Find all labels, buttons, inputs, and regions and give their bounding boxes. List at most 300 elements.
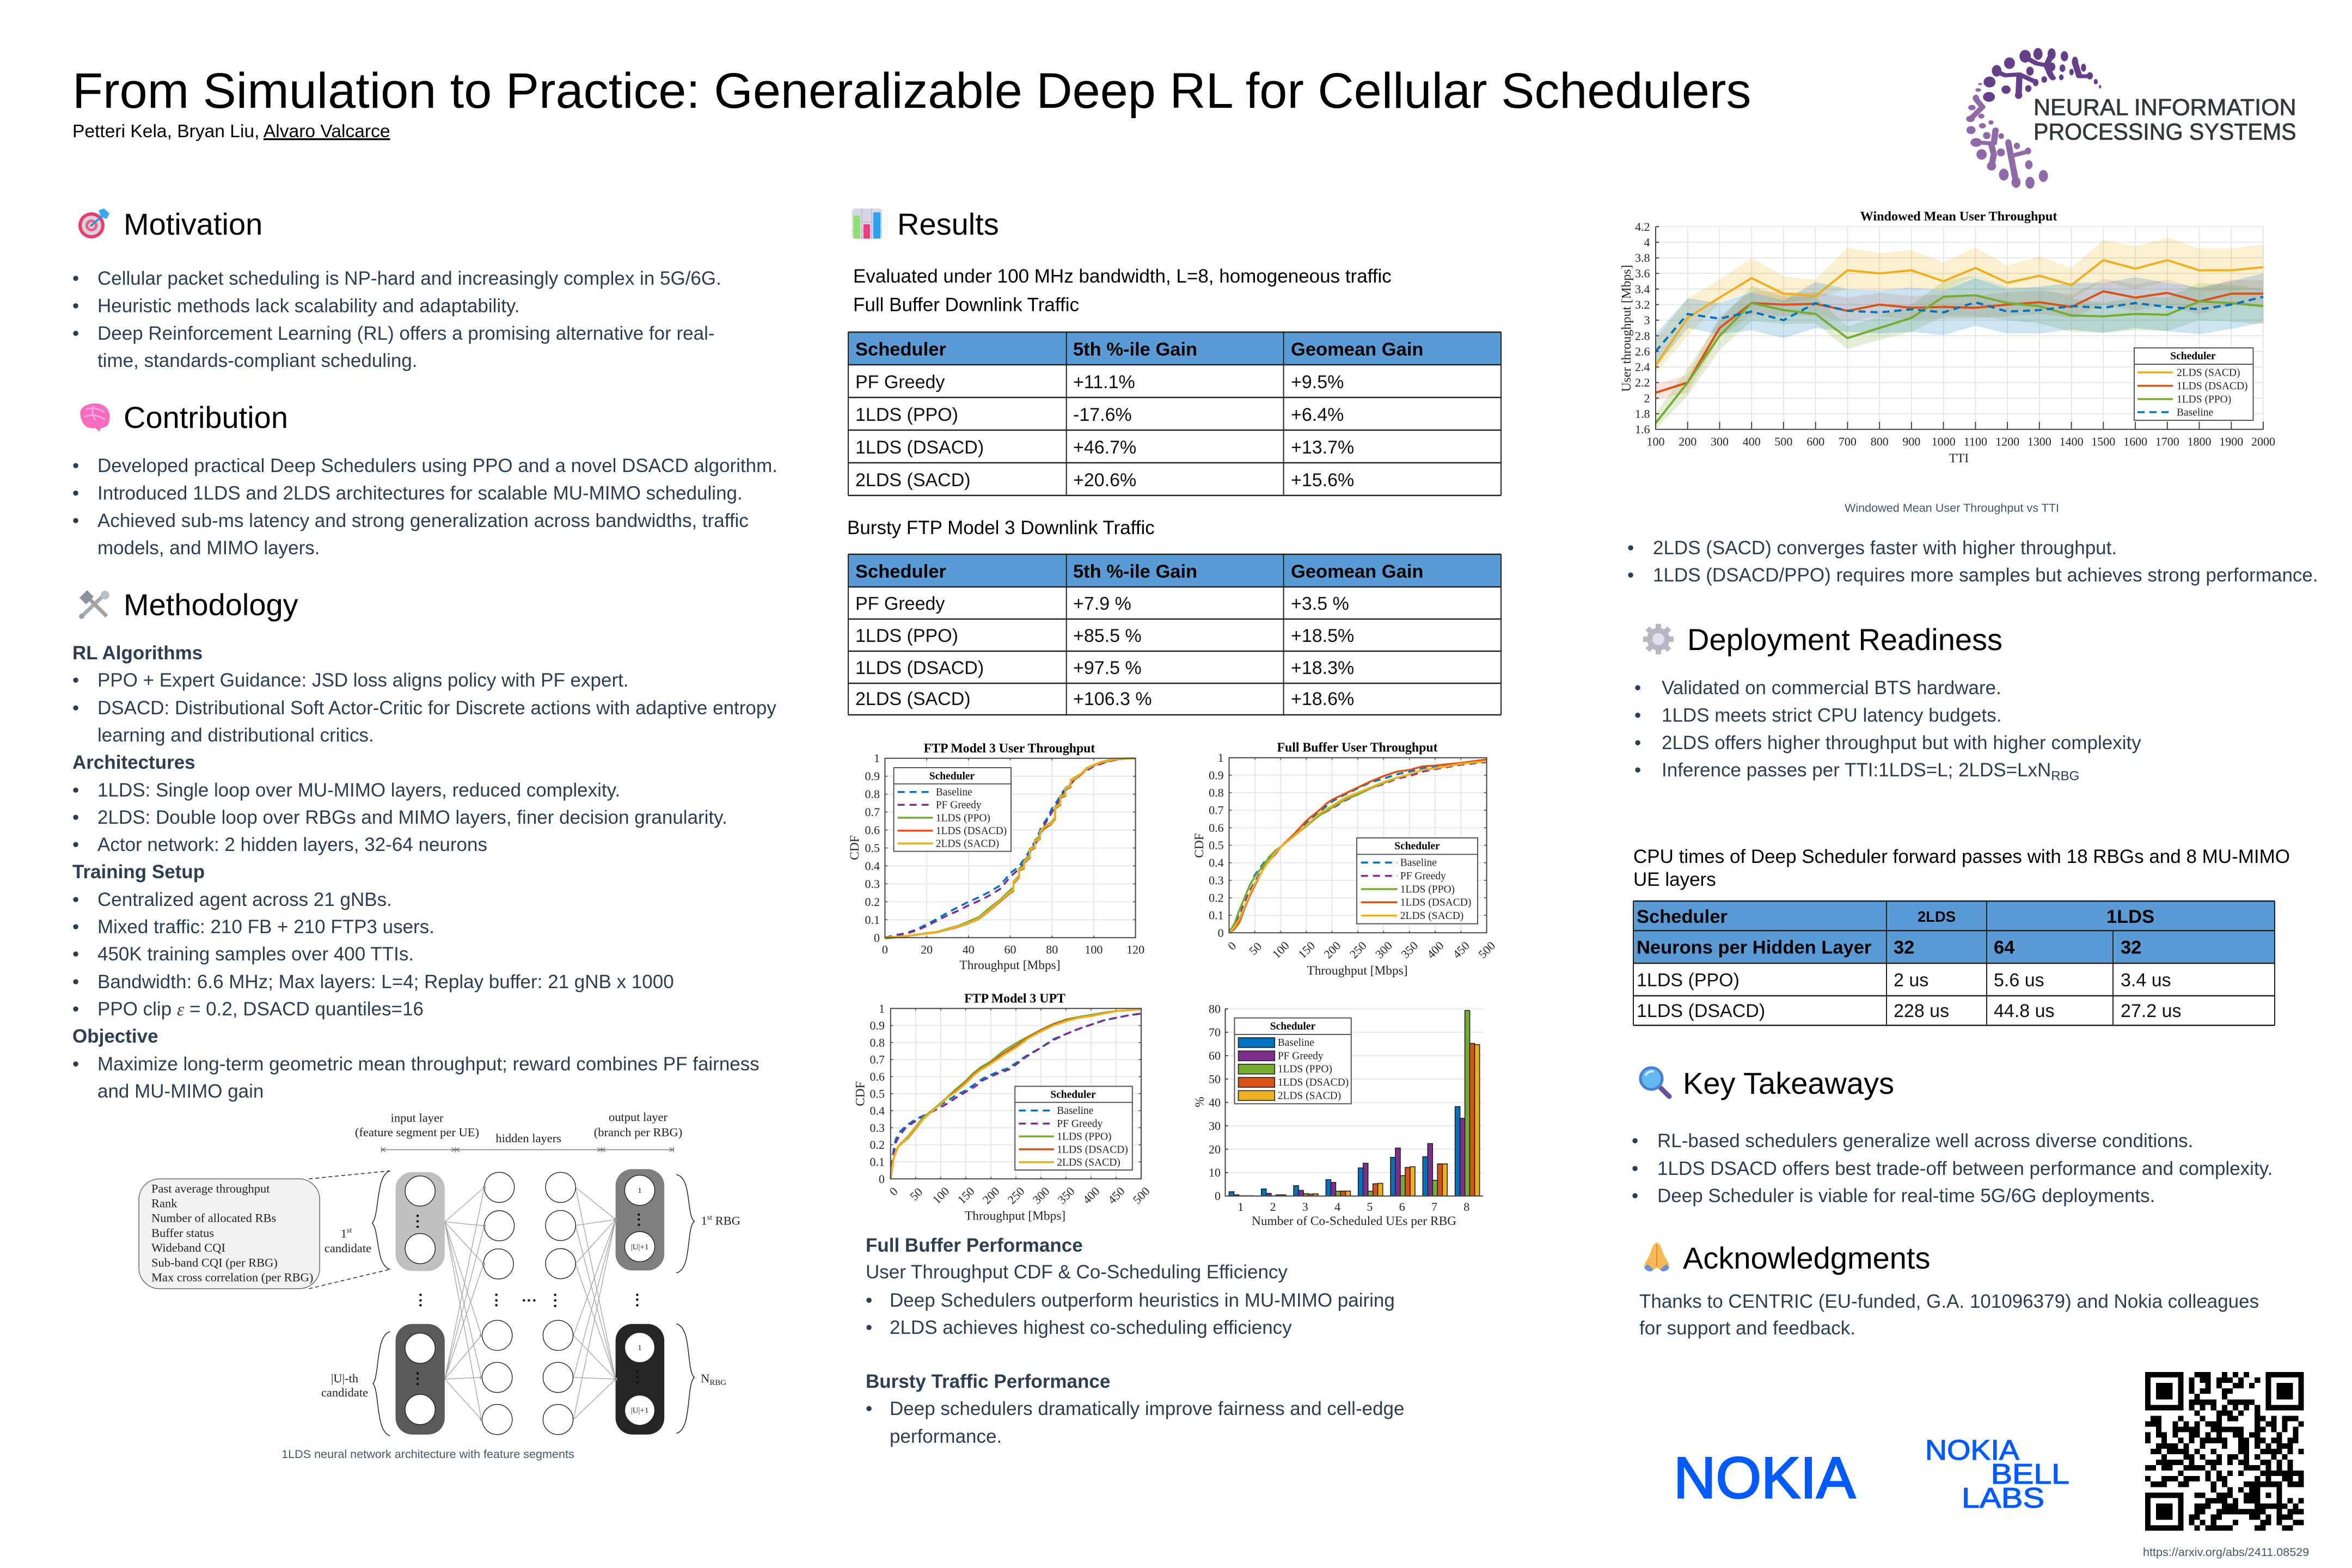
chart: Windowed Mean User Throughput: 900 [1902, 434, 1920, 449]
table: CPU times: 3.4 us [2121, 970, 2171, 991]
text: convergence bullets: • [1627, 565, 1634, 586]
QR code [2145, 1372, 2304, 1531]
chart: Windowed Mean User Throughput: 4 [1644, 235, 1650, 249]
diagram: 1LDS neural network architecture: candidate [324, 1241, 371, 1255]
chart: FTP Model 3 UPT: 200 [980, 1184, 1002, 1206]
chart: Windowed Mean User Throughput: 3.8 [1635, 251, 1650, 265]
chart: FTP Model 3 UPT: 1LDS (DSACD) [1057, 1144, 1128, 1155]
table: bursty traffic gains [848, 554, 1501, 715]
diagram: 1LDS neural network architecture: N [701, 1371, 709, 1385]
caption: windowed throughput: Windowed Mean User Throughput vs TTI [1845, 501, 2059, 514]
table: full buffer gains: 1LDS (DSACD) [855, 437, 984, 458]
chart: Windowed Mean User Throughput: 4.2 [1635, 220, 1650, 234]
chart: FTP Model 3 User Throughput: 0 [874, 931, 880, 945]
chart: Windowed Mean User Throughput: 2000 [2251, 434, 2275, 449]
chart: FTP Model 3 User Throughput: 0.7 [865, 805, 880, 819]
chart: co-scheduled UEs per RBG bars: 5 [1367, 1200, 1373, 1214]
chart: co-scheduled UEs per RBG bars: 70 [1209, 1026, 1221, 1039]
text: methodology lists: • [72, 670, 79, 691]
chart: Full Buffer User Throughput: Scheduler [1394, 841, 1440, 852]
text: convergence bullets [1627, 537, 2318, 586]
chart: Full Buffer User Throughput: 500 [1475, 939, 1498, 961]
chart: Windowed Mean User Throughput: 3.4 [1635, 282, 1650, 296]
chart: Windowed Mean User Throughput: 400 [1743, 434, 1761, 449]
icon: target [78, 209, 109, 238]
caption: neural network: 1LDS neural network architecture with feature segments [281, 1447, 574, 1461]
text: contribution bullets: Achieved sub-ms latency and strong generalization across bandwidths, traffic [97, 510, 749, 531]
chart: Full Buffer User Throughput: PF Greedy [1400, 871, 1446, 882]
text: motivation bullets: • [72, 295, 79, 317]
chart: Full Buffer User Throughput: 0.9 [1209, 768, 1224, 782]
chart: co-scheduled UEs per RBG bars: Baseline [1278, 1037, 1314, 1049]
table: bursty traffic gains: +18.6% [1291, 689, 1354, 709]
chart: FTP Model 3 UPT: 100 [929, 1184, 952, 1206]
text: performance findings: User Throughput CDF & Co-Scheduling Efficiency [866, 1261, 1288, 1283]
diagram: 1LDS neural network architecture: candidate [321, 1386, 368, 1399]
chart: co-scheduled UEs per RBG bars: 4 [1334, 1200, 1340, 1214]
chart: Full Buffer User Throughput: 0.1 [1209, 909, 1224, 922]
chart: Windowed Mean User Throughput: 2.8 [1635, 329, 1650, 342]
diagram: 1LDS neural network architecture: RBG [712, 1214, 740, 1228]
text: deployment bullets: RBG [2051, 769, 2079, 783]
table: bursty traffic gains: +85.5 % [1073, 626, 1142, 646]
chart: Full Buffer User Throughput: 400 [1424, 939, 1447, 961]
chart: Full Buffer User Throughput: 1LDS (PPO) [1400, 884, 1455, 895]
table: CPU times: 32 [1894, 938, 1914, 958]
table: full buffer gains: Scheduler [855, 339, 946, 360]
chart: FTP Model 3 User Throughput: 80 [1046, 943, 1058, 957]
table: bursty traffic gains: 1LDS (DSACD) [855, 658, 984, 678]
text: deployment bullets: • [1634, 759, 1641, 781]
chart: FTP Model 3 User Throughput: 1LDS (DSACD) [936, 825, 1007, 837]
chart: Full Buffer User Throughput: 2LDS (SACD) [1400, 910, 1463, 922]
text: acknowledgments body [1639, 1291, 2259, 1339]
chart: Full Buffer User Throughput: 1 [1218, 751, 1224, 764]
chart: Windowed Mean User Throughput: 2.6 [1635, 345, 1650, 358]
text: deployment bullets: 2LDS offers higher throughput but with higher complexity [1662, 732, 2141, 754]
chart: Windowed Mean User Throughput: 300 [1711, 434, 1729, 449]
table: bursty traffic gains: +18.3% [1291, 658, 1354, 678]
table: full buffer gains: +13.7% [1291, 437, 1354, 458]
icon: tools [79, 590, 109, 619]
chart: Windowed Mean User Throughput: 1900 [2219, 434, 2243, 449]
chart: FTP Model 3 UPT: 0.8 [870, 1036, 885, 1049]
chart: co-scheduled UEs per RBG bars: 1 [1238, 1200, 1244, 1214]
table: bursty traffic gains: 2LDS (SACD) [855, 689, 971, 709]
table: full buffer gains: 2LDS (SACD) [855, 470, 971, 491]
chart: Windowed Mean User Throughput: 1100 [1964, 434, 1987, 449]
chart: Full Buffer User Throughput: 0.8 [1209, 786, 1224, 799]
text: methodology lists: Architectures [72, 752, 195, 773]
chart: Windowed Mean User Throughput: 1LDS (PPO) [2177, 394, 2231, 405]
text: methodology lists: • [72, 780, 79, 801]
text: methodology lists: Training Setup [72, 861, 205, 883]
logo: NeurIPS [1966, 48, 2296, 189]
diagram: 1LDS neural network architecture: Wideband CQI [151, 1241, 225, 1254]
text: performance findings: Bursty Traffic Performance [866, 1371, 1110, 1392]
table: CPU times: 1LDS [2106, 906, 2154, 927]
text: methodology lists: Actor network: 2 hidden layers, 32-64 neurons [97, 834, 487, 855]
text: contribution bullets: • [72, 482, 79, 504]
chart: FTP Model 3 UPT: 1LDS (PPO) [1057, 1131, 1112, 1143]
table: bursty traffic gains: +7.9 % [1073, 593, 1131, 614]
chart: Windowed Mean User Throughput: 600 [1806, 434, 1824, 449]
table: CPU times: 5.6 us [1994, 970, 2044, 991]
text: deployment bullets: 1LDS meets strict CPU latency budgets. [1662, 705, 2001, 726]
text: methodology lists: PPO + Expert Guidance: JSD loss aligns policy with PF expert. [97, 670, 629, 691]
text: motivation bullets [72, 268, 721, 371]
chart: Windowed Mean User Throughput: 1300 [2028, 434, 2051, 449]
chart: Full Buffer User Throughput: 0 [1225, 939, 1239, 953]
text: performance findings: • [866, 1317, 872, 1338]
diagram: 1LDS neural network architecture: Sub-band CQI (per RBG) [151, 1255, 278, 1269]
chart: Windowed Mean User Throughput: 1LDS (DSACD) [2177, 381, 2248, 392]
chart: Full Buffer User Throughput: 0.5 [1209, 838, 1224, 852]
table: full buffer gains: +11.1% [1073, 372, 1135, 393]
text: performance findings: performance. [890, 1426, 1002, 1447]
text: CPU times description: UE layers [1633, 869, 1716, 890]
text: motivation bullets: Deep Reinforcement Learning (RL) offers a promising alternative for real- [97, 323, 715, 344]
chart: co-scheduled UEs per RBG bars: 80 [1209, 1002, 1221, 1016]
chart: Full Buffer User Throughput: 0.4 [1209, 856, 1224, 869]
table: CPU times: Scheduler [1637, 906, 1728, 927]
text: methodology lists: Mixed traffic: 210 FB + 210 FTP3 users. [97, 916, 434, 938]
text: methodology lists: learning and distributional critics. [97, 725, 374, 746]
text: deployment bullets: • [1634, 677, 1641, 699]
chart: FTP Model 3 UPT: 150 [955, 1184, 977, 1206]
chart: Full Buffer User Throughput: 250 [1347, 939, 1369, 961]
diagram: 1LDS neural network architecture: Number of allocated RBs [151, 1211, 276, 1225]
chart: FTP Model 3 User Throughput: 0 [882, 943, 888, 957]
chart: FTP Model 3 UPT: 50 [907, 1185, 925, 1203]
logo: NeurIPS: PROCESSING SYSTEMS [2033, 119, 2296, 145]
table: bursty traffic gains: 1LDS (PPO) [855, 626, 958, 646]
heading: contribution: Contribution [124, 400, 288, 434]
chart: FTP Model 3 User Throughput: 0.8 [865, 787, 880, 801]
diagram: 1LDS neural network architecture: |U|-th [331, 1371, 358, 1385]
heading: results: Results [897, 207, 999, 241]
text: deployment bullets: • [1634, 705, 1641, 726]
text: CPU times description: CPU times of Deep Scheduler forward passes with 18 RBGs and 8 MU-MIMO [1633, 846, 2290, 867]
chart: Windowed Mean User Throughput: 2.2 [1635, 376, 1650, 389]
chart: FTP Model 3 UPT: Scheduler [1050, 1089, 1096, 1101]
chart: Full Buffer User Throughput: 0.2 [1209, 891, 1224, 905]
text: methodology lists: • [72, 999, 79, 1020]
text: acknowledgments body: for support and feedback. [1639, 1318, 1855, 1339]
chart: FTP Model 3 UPT: 0.3 [870, 1121, 885, 1135]
text: methodology lists: Bandwidth: 6.6 MHz; Max layers: L=4; Replay buffer: 21 gNB x 1000 [97, 971, 674, 993]
diagram: 1LDS neural network architecture: (branch per RBG) [594, 1125, 682, 1139]
chart: FTP Model 3 User Throughput: Scheduler [929, 771, 975, 782]
logo: Nokia Bell Labs: NOKIA [1925, 1435, 2019, 1466]
text: takeaways bullets: RL-based schedulers generalize well across diverse conditions. [1657, 1130, 2193, 1152]
text: methodology lists: • [72, 697, 79, 719]
chart: co-scheduled UEs per RBG bars: PF Greedy [1278, 1050, 1324, 1062]
chart: co-scheduled UEs per RBG bars: 0 [1215, 1189, 1221, 1203]
text: methodology lists: • [72, 834, 79, 855]
chart: Windowed Mean User Throughput: 2LDS (SACD) [2177, 367, 2240, 378]
chart: co-scheduled UEs per RBG bars: 2LDS (SACD) [1278, 1090, 1341, 1101]
text: motivation bullets: • [72, 268, 79, 289]
chart: FTP Model 3 UPT: 0.1 [870, 1155, 885, 1168]
chart: co-scheduled UEs per RBG bars: 6 [1399, 1200, 1405, 1214]
text: takeaways bullets: • [1632, 1158, 1638, 1179]
chart: Windowed Mean User Throughput: 200 [1679, 434, 1696, 449]
text: contribution bullets: models, and MIMO layers. [97, 537, 320, 559]
chart: FTP Model 3 User Throughput: 0.9 [865, 769, 880, 783]
panel: acknowledgments [1639, 1241, 2259, 1339]
chart: Windowed Mean User Throughput: 3.2 [1635, 298, 1650, 311]
chart: FTP Model 3 User Throughput: 60 [1004, 943, 1016, 957]
panel: motivation [72, 207, 721, 371]
text: performance findings: • [866, 1290, 872, 1311]
table: full buffer gains: +15.6% [1291, 470, 1354, 491]
chart: Full Buffer User Throughput: 1LDS (DSACD) [1400, 897, 1471, 909]
diagram: 1LDS neural network architecture: |U|+1 [631, 1406, 648, 1415]
chart: FTP Model 3 UPT: 300 [1030, 1184, 1052, 1206]
chart: Windowed Mean User Throughput: 3 [1644, 314, 1650, 327]
chart: Full Buffer User Throughput: Throughput [Mbps] [1307, 964, 1408, 978]
heading: methodology: Methodology [124, 587, 298, 622]
chart: co-scheduled UEs per RBG bars: 10 [1209, 1166, 1221, 1179]
text: takeaways bullets: • [1632, 1130, 1638, 1152]
chart: FTP Model 3 User Throughput: 0.5 [865, 841, 880, 855]
text: evaluation conditions: Evaluated under 100 MHz bandwidth, L=8, homogeneous traffic [853, 266, 1392, 287]
heading: deployment readiness: Deployment Readiness [1687, 622, 2002, 657]
icon: magnifier [1640, 1068, 1669, 1097]
table: CPU times: 2 us [1894, 970, 1928, 991]
chart: Windowed Mean User Throughput: 100 [1646, 434, 1665, 449]
chart: FTP Model 3 User Throughput: 0.3 [865, 877, 880, 891]
table: full buffer gains: +6.4% [1291, 405, 1344, 425]
table: bursty traffic gains: +97.5 % [1073, 658, 1142, 678]
panel: key takeaways [1632, 1066, 2273, 1206]
table: CPU times: 44.8 us [1994, 1001, 2055, 1021]
chart: FTP Model 3 UPT: FTP Model 3 UPT [964, 992, 1065, 1006]
chart: FTP Model 3 UPT: 0.4 [870, 1104, 885, 1118]
table: bursty traffic gains: Scheduler [855, 561, 946, 582]
text: takeaways bullets: 1LDS DSACD offers best trade-off between performance and complexity. [1657, 1158, 2273, 1179]
text: methodology lists: and MU-MIMO gain [97, 1081, 264, 1102]
text: methodology lists: Objective [72, 1026, 158, 1047]
chart: Full Buffer User Throughput [1192, 741, 1498, 978]
icon: bar chart [852, 209, 882, 239]
chart: FTP Model 3 UPT: PF Greedy [1057, 1118, 1103, 1130]
chart: FTP Model 3 User Throughput: 0.4 [865, 859, 880, 873]
chart: Windowed Mean User Throughput: 1700 [2155, 434, 2179, 449]
chart: FTP Model 3 User Throughput: 100 [1085, 943, 1102, 957]
chart: FTP Model 3 User Throughput: 0.2 [865, 895, 880, 909]
icon: praying hands [1644, 1242, 1669, 1271]
diagram: 1LDS neural network architecture: 1 [341, 1227, 347, 1240]
chart: FTP Model 3 UPT: 0.7 [870, 1053, 885, 1067]
text: takeaways bullets: Deep Scheduler is viable for real-time 5G/6G deployments. [1657, 1185, 2155, 1206]
text: takeaways bullets: • [1632, 1185, 1638, 1206]
chart: co-scheduled UEs per RBG bars: 30 [1209, 1119, 1221, 1132]
chart: Windowed Mean User Throughput: 1000 [1932, 434, 1956, 449]
chart: FTP Model 3 UPT: 450 [1105, 1184, 1128, 1206]
text: motivation bullets: • [72, 323, 79, 344]
chart: FTP Model 3 User Throughput: 40 [963, 943, 975, 957]
heading: motivation: Motivation [124, 207, 262, 241]
chart: Windowed Mean User Throughput: 1600 [2123, 434, 2147, 449]
table: full buffer gains: PF Greedy [855, 372, 945, 393]
icon: brain [80, 403, 109, 432]
logo: Nokia: NOKIA [1674, 1445, 1856, 1510]
diagram: 1LDS neural network architecture: (feature segment per UE) [355, 1125, 479, 1139]
chart: Windowed Mean User Throughput: Scheduler [2170, 351, 2216, 362]
text: methodology lists: • [72, 1054, 79, 1075]
diagram: 1LDS neural network architecture: 1 [638, 1186, 642, 1195]
text: acknowledgments body: Thanks to CENTRIC (EU-funded, G.A. 101096379) and Nokia colleagues [1639, 1291, 2259, 1312]
chart: Full Buffer User Throughput: 0.6 [1209, 821, 1224, 835]
chart: Full Buffer User Throughput: 300 [1373, 939, 1395, 961]
chart: FTP Model 3 UPT [854, 992, 1153, 1223]
text: contribution bullets: • [72, 510, 79, 531]
chart: Windowed Mean User Throughput: TTI [1949, 451, 1969, 465]
chart: Windowed Mean User Throughput: 2.4 [1635, 360, 1650, 374]
chart: co-scheduled UEs per RBG bars: Number of Co-Scheduled UEs per RBG [1252, 1214, 1456, 1228]
chart: co-scheduled UEs per RBG bars: % [1193, 1097, 1207, 1107]
chart: co-scheduled UEs per RBG bars: 7 [1431, 1200, 1437, 1214]
chart: FTP Model 3 UPT: 250 [1005, 1184, 1027, 1206]
chart: FTP Model 3 UPT: 0 [879, 1172, 885, 1186]
diagram: 1LDS neural network architecture: st [707, 1214, 712, 1222]
chart: FTP Model 3 UPT: 500 [1130, 1184, 1153, 1206]
text: motivation bullets: Cellular packet scheduling is NP-hard and increasingly complex in 5G/6G. [97, 268, 721, 289]
chart: Windowed Mean User Throughput: 500 [1774, 434, 1792, 449]
chart: FTP Model 3 User Throughput: 1LDS (PPO) [936, 812, 990, 824]
text: methodology lists: • [72, 807, 79, 828]
diagram: 1LDS neural network architecture: Rank [151, 1197, 177, 1210]
text: performance findings: 2LDS achieves highest co-scheduling efficiency [890, 1317, 1292, 1338]
table: CPU times: 228 us [1894, 1001, 1949, 1021]
chart: co-scheduled UEs per RBG bars: 1LDS (DSACD) [1278, 1077, 1349, 1088]
table: bursty traffic gains: +3.5 % [1291, 593, 1349, 614]
table: bursty traffic gains: PF Greedy [855, 593, 945, 614]
text: methodology lists: 2LDS: Double loop over RBGs and MIMO layers, finer decision granularity. [97, 807, 727, 828]
text: arXiv URL: https://arxiv.org/abs/2411.08529 [2143, 1545, 2309, 1559]
chart: Full Buffer User Throughput: 200 [1321, 939, 1343, 961]
diagram: 1LDS neural network architecture [139, 1110, 740, 1436]
table: CPU times: 1LDS (DSACD) [1637, 1001, 1765, 1021]
chart: FTP Model 3 User Throughput: 2LDS (SACD) [936, 838, 999, 850]
diagram: 1LDS neural network architecture: Buffer status [151, 1226, 214, 1240]
table: CPU times: 32 [2121, 938, 2141, 958]
diagram: 1LDS neural network architecture: RBG [709, 1379, 726, 1387]
table: CPU times [1633, 901, 2275, 1025]
chart: FTP Model 3 UPT: Baseline [1057, 1105, 1093, 1117]
chart: FTP Model 3 UPT: 2LDS (SACD) [1057, 1157, 1120, 1168]
chart: co-scheduled UEs per RBG bars [1193, 1002, 1483, 1228]
icon: gear [1643, 624, 1674, 654]
table: full buffer gains: -17.6% [1073, 405, 1132, 425]
panel: contribution [72, 400, 777, 559]
chart: FTP Model 3 User Throughput: 20 [921, 943, 933, 957]
diagram: 1LDS neural network architecture: 1 [701, 1214, 707, 1228]
text: methodology lists: • [72, 916, 79, 938]
text: methodology lists: • [72, 971, 79, 993]
chart: FTP Model 3 UPT: 0.6 [870, 1070, 885, 1083]
chart: Windowed Mean User Throughput: 800 [1871, 434, 1889, 449]
chart: FTP Model 3 UPT: 350 [1055, 1184, 1077, 1206]
text: contribution bullets: Developed practical Deep Schedulers using PPO and a novel DSACD algorithm. [97, 455, 777, 476]
text: performance findings: Deep schedulers dramatically improve fairness and cell-edge [890, 1398, 1404, 1419]
chart: Windowed Mean User Throughput: 1.8 [1635, 407, 1650, 420]
table: bursty traffic gains: +106.3 % [1073, 689, 1152, 709]
text: deployment bullets: Inference passes per TTI:1LDS=L; 2LDS=LxN [1662, 759, 2051, 781]
panel: methodology [72, 587, 776, 1102]
panel: results [847, 207, 1501, 1447]
diagram: 1LDS neural network architecture: |U|+1 [631, 1243, 648, 1252]
text: motivation bullets: time, standards-compliant scheduling. [97, 350, 418, 371]
chart: Windowed Mean User Throughput: 1200 [1995, 434, 2019, 449]
text: takeaways bullets [1632, 1130, 2273, 1206]
chart: Windowed Mean User Throughput: Windowed Mean User Throughput [1860, 209, 2057, 224]
logo: Nokia Bell Labs: BELL [1991, 1459, 2069, 1490]
text: methodology lists: 1LDS: Single loop over MU-MIMO layers, reduced complexity. [97, 780, 620, 801]
table: bursty traffic gains: 5th %-ile Gain [1073, 561, 1197, 582]
table: full buffer gains: Geomean Gain [1291, 339, 1423, 360]
chart: FTP Model 3 UPT: CDF [854, 1081, 868, 1106]
text: deployment bullets [1634, 677, 2141, 783]
text: performance findings [866, 1235, 1404, 1447]
table: full buffer gains: +46.7% [1073, 437, 1136, 458]
heading: acknowledgments: Acknowledgments [1683, 1241, 1930, 1275]
diagram: 1LDS neural network architecture: 1 [638, 1344, 642, 1352]
table: CPU times: 64 [1994, 938, 2014, 958]
diagram: 1LDS neural network architecture: input layer [391, 1111, 444, 1124]
diagram: 1LDS neural network architecture: Max cross correlation (per RBG) [151, 1271, 313, 1284]
text: convergence bullets: 1LDS (DSACD/PPO) requires more samples but achieves strong performance. [1653, 565, 2318, 586]
diagram: 1LDS neural network architecture: hidden layers [495, 1131, 561, 1145]
chart: co-scheduled UEs per RBG bars: 40 [1209, 1095, 1221, 1109]
panel: deployment readiness [1634, 622, 2141, 783]
table: full buffer gains: 5th %-ile Gain [1073, 339, 1197, 360]
text: methodology lists: Centralized agent across 21 gNBs. [97, 889, 392, 910]
chart: co-scheduled UEs per RBG bars: Scheduler [1270, 1021, 1315, 1032]
chart: Full Buffer User Throughput: CDF [1192, 833, 1206, 858]
chart: Full Buffer User Throughput: 0.3 [1209, 873, 1224, 887]
chart: Windowed Mean User Throughput: 1400 [2060, 434, 2084, 449]
text: methodology lists: 450K training samples over 400 TTIs. [97, 944, 414, 965]
chart: co-scheduled UEs per RBG bars: 3 [1302, 1200, 1308, 1214]
chart: Windowed Mean User Throughput: 1.6 [1635, 422, 1650, 436]
diagram: 1LDS neural network architecture: Past average throughput [151, 1182, 270, 1196]
text: deployment bullets: • [1634, 732, 1641, 754]
logo: Nokia Bell Labs: LABS [1962, 1483, 2044, 1514]
diagram: 1LDS neural network architecture: output layer [609, 1110, 668, 1124]
table: bursty traffic gains: +18.5% [1291, 626, 1354, 646]
chart: FTP Model 3 User Throughput: Throughput [Mbps] [959, 958, 1061, 972]
heading: key takeaways: Key Takeaways [1683, 1066, 1894, 1100]
text: bursty traffic heading: Bursty FTP Model 3 Downlink Traffic [847, 517, 1155, 538]
chart: FTP Model 3 UPT: Throughput [Mbps] [965, 1209, 1065, 1223]
text: performance findings: • [866, 1398, 872, 1419]
chart: Windowed Mean User Throughput: 700 [1839, 434, 1857, 449]
table: bursty traffic gains: Geomean Gain [1291, 561, 1423, 582]
table: full buffer gains: +20.6% [1073, 470, 1136, 491]
chart: Full Buffer User Throughput: 100 [1270, 939, 1292, 961]
text: deployment bullets: Validated on commercial BTS hardware. [1662, 677, 2001, 699]
text: contribution bullets: Introduced 1LDS and 2LDS architectures for scalable MU-MIMO scheduling. [97, 482, 743, 504]
text: convergence bullets: 2LDS (SACD) converges faster with higher throughput. [1653, 537, 2117, 559]
text: methodology lists [72, 642, 776, 1102]
table: CPU times: 27.2 us [2121, 1001, 2182, 1021]
chart: FTP Model 3 UPT: 0.9 [870, 1019, 885, 1032]
text: methodology lists: • [72, 944, 79, 965]
chart: Full Buffer User Throughput: 50 [1246, 940, 1264, 958]
